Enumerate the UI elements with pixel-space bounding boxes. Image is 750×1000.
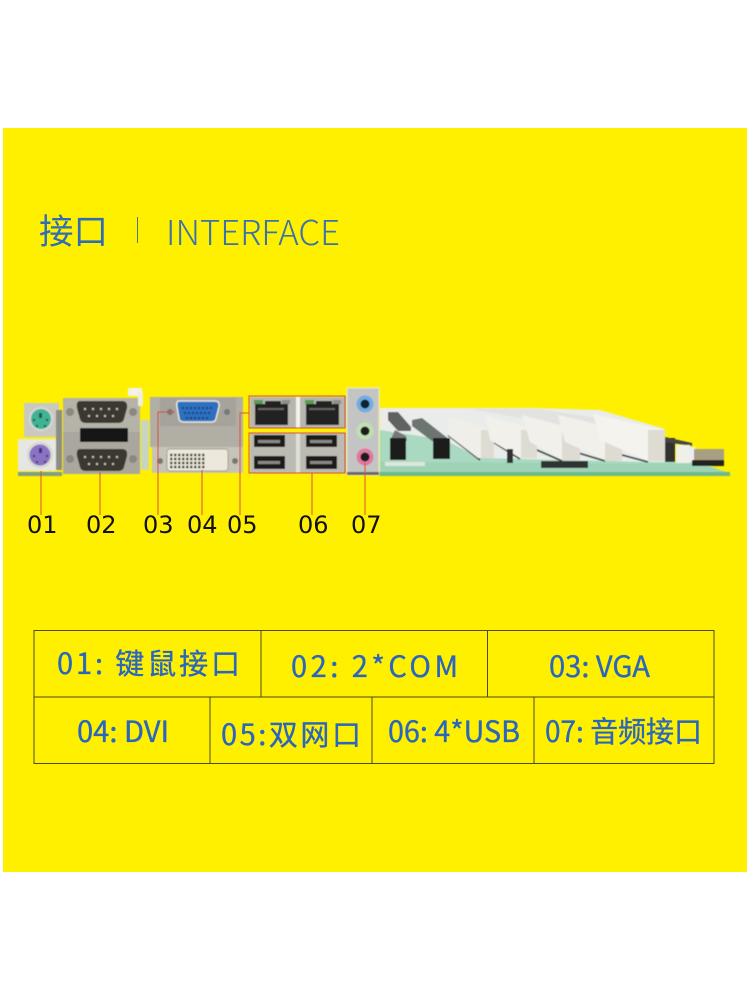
motherboard rear panel photo illustration — [18, 388, 730, 476]
LAN highlight box — [249, 396, 345, 428]
expansion slots and board — [379, 408, 730, 476]
left connectors — [388, 412, 411, 431]
green board surface — [380, 430, 730, 474]
cell 04: 04: DVI — [77, 709, 169, 751]
white PCI slots — [448, 416, 494, 458]
port: VGA — [150, 397, 243, 447]
title: english heading: INTERFACE — [166, 206, 340, 255]
cell 06: 06: 4*USB — [388, 709, 520, 751]
port legend table — [34, 630, 714, 764]
label 06: 06 — [298, 511, 329, 539]
USB highlight box — [249, 433, 345, 473]
cell 02: 02: 2*COM — [291, 644, 458, 686]
leader 02 — [99, 472, 101, 515]
title divider — [137, 217, 138, 243]
leader 03 — [158, 412, 175, 515]
cell 05: 05:双网口 — [221, 712, 361, 754]
title: chinese heading: 接口 — [39, 204, 108, 255]
cell 03: 03: VGA — [549, 644, 650, 686]
port: DVI — [152, 447, 243, 473]
leader 06 — [311, 473, 313, 515]
chip and header components — [507, 449, 513, 463]
label 02: 02 — [86, 511, 117, 539]
port: 2 COM serial — [63, 388, 149, 474]
cell 01: 01: 键鼠接口 — [57, 641, 240, 683]
leader 07 — [364, 463, 366, 515]
label 07: 07 — [351, 511, 382, 539]
leader 04 — [201, 470, 203, 515]
port: audio jacks — [347, 388, 379, 475]
label 04: 04 — [187, 511, 218, 539]
label 05: 05 — [227, 511, 258, 539]
port number labels — [27, 511, 382, 539]
port: dual LAN — [250, 397, 346, 428]
table text — [57, 641, 702, 754]
leader lines and highlight boxes — [41, 396, 365, 515]
slot shadows — [448, 435, 648, 462]
cell 07: 07: 音频接口 — [545, 709, 702, 751]
board back edge — [380, 408, 665, 466]
table grid — [34, 630, 714, 764]
leader 05 — [240, 413, 249, 515]
label 01: 01 — [27, 511, 58, 539]
title — [39, 204, 340, 255]
yellow background panel — [3, 128, 747, 872]
port: 4 USB — [250, 433, 346, 473]
label 03: 03 — [143, 511, 174, 539]
port: PS/2 keyboard and mouse — [18, 403, 62, 476]
leader 01 — [40, 471, 42, 515]
